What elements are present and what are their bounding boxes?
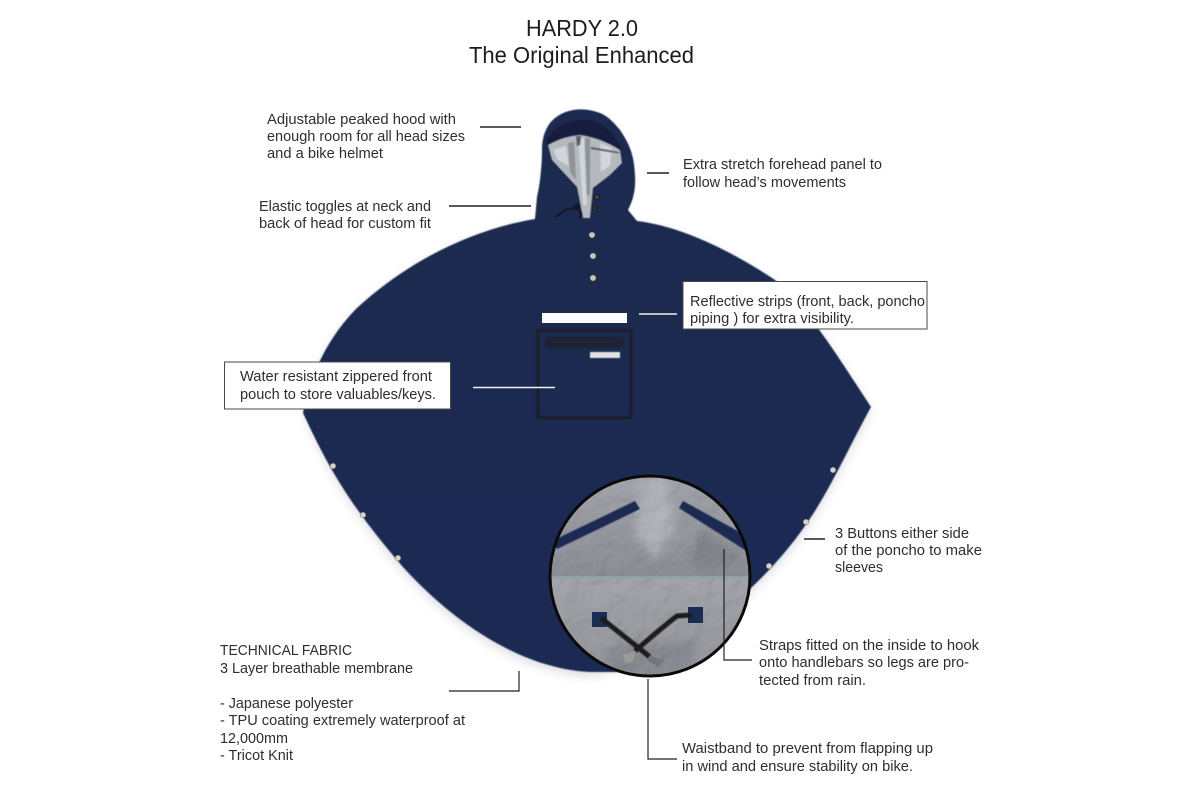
callout: front pouch: Water resistant zippered front: [240, 369, 432, 385]
callout: technical fabric: - Japanese polyester: [220, 696, 353, 712]
callout: hood: and a bike helmet: [267, 146, 383, 162]
front snap buttons: [589, 232, 596, 281]
callout: inner straps: tected from rain.: [759, 673, 866, 689]
callout: front pouch: pouch to store valuables/keys.: [240, 387, 436, 403]
callout: technical fabric: 3 Layer breathable membrane: [220, 661, 413, 677]
callout: side buttons: of the poncho to make: [835, 543, 982, 559]
callout: hood: enough room for all head sizes: [267, 129, 465, 145]
waist straps: [601, 615, 692, 657]
inset: inside of poncho: [545, 472, 755, 682]
callout: side buttons: [804, 526, 982, 576]
callout: reflective strips: piping ) for extra visibility.: [690, 311, 854, 327]
hood lining shading: [553, 138, 612, 205]
callout: inner straps: onto handlebars so legs are pro-: [759, 655, 969, 671]
callout: hood: [267, 112, 521, 162]
hood lining: [548, 135, 622, 218]
callout: forehead panel: [647, 157, 882, 191]
callout: elastic toggles: [259, 199, 531, 232]
callout: side buttons: sleeves: [835, 560, 883, 576]
callout: hood: Adjustable peaked hood with: [267, 112, 456, 128]
hood brim shading: [546, 120, 622, 150]
callout: technical fabric: 12,000mm: [220, 731, 288, 747]
navy tape: [552, 501, 640, 549]
callout: forehead panel: Extra stretch forehead panel to: [683, 157, 882, 173]
callout: waistband: in wind and ensure stability on bike.: [682, 759, 913, 775]
title: [469, 15, 694, 68]
poncho illustration: [303, 109, 871, 676]
callout: technical fabric: - Tricot Knit: [220, 748, 293, 764]
callout: elastic toggles: back of head for custom fit: [259, 216, 431, 232]
buckle: [623, 651, 636, 663]
reflective strip: [542, 313, 627, 323]
front pouch: [538, 330, 631, 418]
callout: waistband: Waistband to prevent from flapping up: [682, 741, 933, 757]
callout: inner straps: [724, 549, 980, 689]
callout: front pouch: [224, 362, 555, 409]
hood toggles: [556, 194, 600, 218]
strap anchors: [592, 612, 607, 627]
callout: reflective strips: Reflective strips (front, back, poncho: [690, 294, 925, 310]
poncho body: [303, 109, 871, 672]
side snap buttons: [330, 463, 836, 569]
callout: reflective strips: [639, 282, 927, 329]
callout: side buttons: 3 Buttons either side: [835, 526, 969, 542]
title: HARDY 2.0: [526, 15, 638, 41]
callout: elastic toggles: Elastic toggles at neck and: [259, 199, 431, 215]
callout: technical fabric: - TPU coating extremely waterproof at: [220, 713, 465, 729]
callout: technical fabric: TECHNICAL FABRIC: [220, 643, 352, 659]
callout: waistband: [648, 679, 933, 775]
callout: inner straps: Straps fitted on the inside to hook: [759, 638, 980, 654]
callout: technical fabric: [220, 643, 519, 764]
title: The Original Enhanced: [469, 42, 694, 68]
callout: forehead panel: follow head’s movements: [683, 175, 846, 191]
